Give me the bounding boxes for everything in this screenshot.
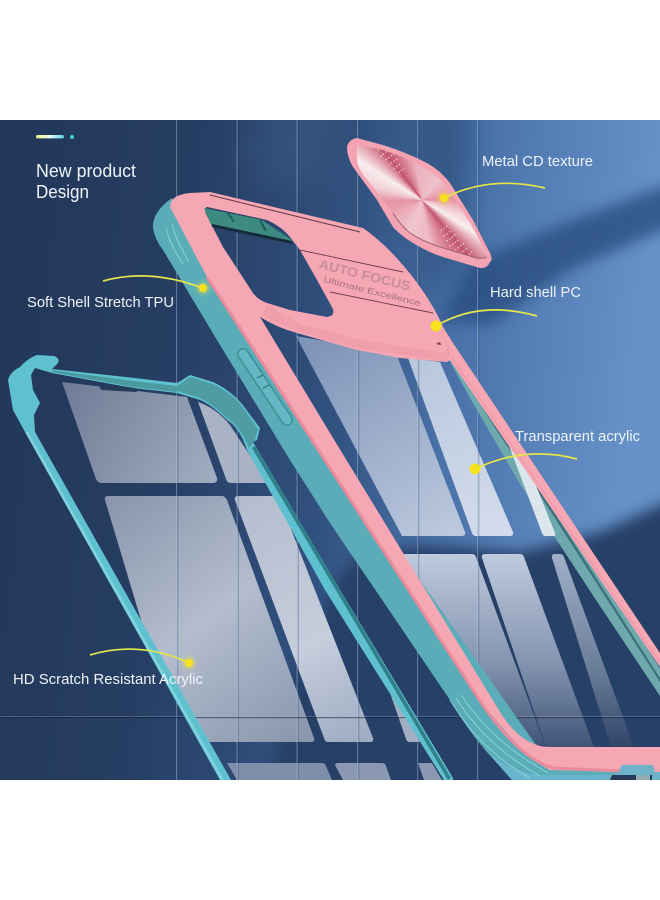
- slider engraved text: [318, 260, 420, 306]
- corner ridges: [166, 224, 548, 778]
- outer case glass reflections: [296, 336, 634, 747]
- background wall: [0, 100, 660, 820]
- label: hard shell: Hard shell PC: [490, 284, 581, 301]
- infographic canvas: [0, 120, 660, 780]
- camera slot green interior: [204, 208, 292, 244]
- vertical wall grooves: [176, 120, 479, 780]
- label: metal CD: Metal CD texture: [482, 153, 593, 170]
- title: New product: [36, 161, 136, 181]
- label: HD acrylic: HD Scratch Resistant Acrylic: [13, 671, 203, 688]
- callout: transparent acrylic pointer: [470, 454, 577, 474]
- outer case right side inner wall: [448, 358, 660, 696]
- label: transparent acrylic: Transparent acrylic: [515, 428, 640, 445]
- outer case soft TPU shell: [153, 198, 660, 780]
- callout: hard shell pointer: [430, 310, 537, 332]
- slider engraved text: Ultimate Excellence: [323, 274, 422, 308]
- outer case pink PC shell: [170, 192, 660, 773]
- inner case frame: [8, 355, 453, 780]
- inner case glass reflections: [62, 382, 442, 780]
- callout: metal CD pointer: [438, 183, 545, 204]
- label: soft shell: Soft Shell Stretch TPU: [27, 294, 174, 311]
- callout lines and dots: [90, 183, 577, 669]
- horizontal wall seam: [0, 716, 660, 718]
- callout: soft shell pointer: [103, 276, 209, 294]
- accent mark: [36, 135, 74, 139]
- slider engraved text: AUTO FOCUS: [317, 256, 412, 294]
- disc radial sheen: [357, 145, 486, 258]
- callout: HD acrylic pointer: [90, 649, 195, 669]
- side buttons: [243, 354, 287, 420]
- title second line: Design: [36, 182, 89, 202]
- bottom charging tab: [610, 765, 660, 780]
- camera slider metal CD disc: [347, 138, 492, 268]
